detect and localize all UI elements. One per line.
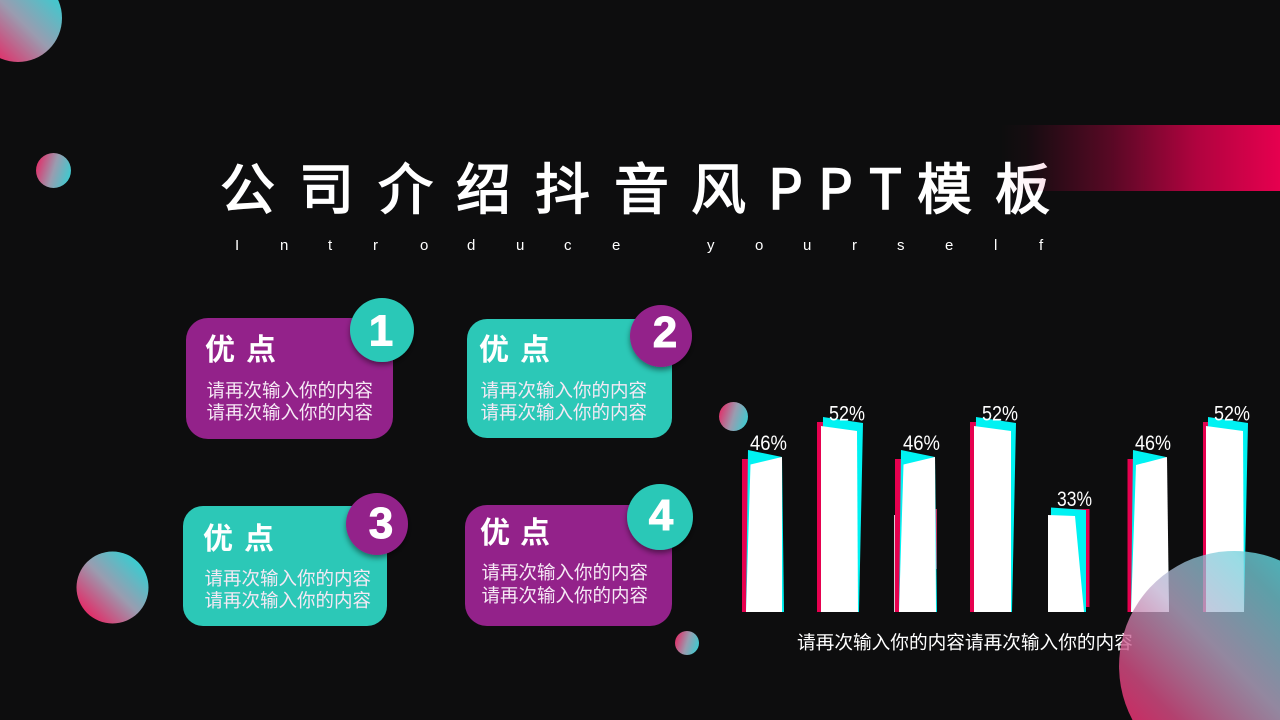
chart caption: 请再次输入你的内容请再次输入你的内容 — [797, 628, 1133, 655]
decorative gradient band — [1000, 125, 1280, 191]
bar 5: 33%: 33% — [1057, 488, 1092, 511]
icon: medium gradient circle left — [76, 552, 148, 624]
bar 4: 52%: 52% — [982, 402, 1018, 426]
icon: small gradient circle left — [36, 153, 71, 188]
bar 3: 46%: 46% — [903, 432, 940, 455]
bar 3: 46% — [894, 432, 940, 612]
bar 1: 46% — [742, 432, 787, 612]
text block: card 4: 请再次输入你的内容 — [482, 582, 648, 608]
badge: number 2: 2 — [653, 308, 677, 357]
bar 7: 52% — [1203, 402, 1250, 612]
icon: small gradient circle above chart — [719, 402, 748, 431]
panel: advantage 4 — [465, 484, 693, 626]
bar 2: 52%: 52% — [829, 402, 865, 426]
icon: large translucent gradient circle — [1119, 551, 1280, 720]
title: 公司介绍抖音风PPT模板 — [220, 145, 1050, 225]
bar 6: 46% — [1128, 432, 1171, 612]
text block: card 4: 请再次输入你的内容 — [482, 559, 648, 585]
text block: card 2 — [480, 377, 647, 425]
text block: card 2: 请再次输入你的内容 — [480, 399, 647, 425]
badge: number 4 — [627, 484, 693, 550]
badge: number 4: 4 — [649, 491, 674, 540]
text block: card 1: 请再次输入你的内容 — [206, 377, 373, 403]
bar 6: 46%: 46% — [1135, 432, 1171, 455]
text block: card 1 — [206, 377, 373, 425]
bar 7: 52%: 52% — [1214, 402, 1250, 426]
text block: card 3 — [204, 565, 371, 613]
bar 1: 46%: 46% — [750, 432, 787, 455]
heading: card 3: 优点 — [203, 514, 285, 558]
badge: number 3 — [346, 493, 408, 555]
heading: card 2: 优点 — [479, 325, 561, 369]
icon: top-left gradient circle — [0, 0, 62, 62]
text block: card 3: 请再次输入你的内容 — [204, 565, 371, 591]
subtitle: Introduceyourself — [235, 237, 1044, 254]
badge: number 1: 1 — [369, 306, 393, 356]
panel: advantage 2 — [467, 305, 692, 438]
panel: advantage 1 — [186, 298, 414, 439]
text block: card 3: 请再次输入你的内容 — [204, 587, 371, 613]
bar 4: 52% — [970, 402, 1018, 612]
icon: small gradient circle bottom center — [675, 631, 699, 655]
heading: card 4: 优点 — [480, 508, 560, 552]
text block: card 4 — [482, 559, 648, 608]
badge: number 3: 3 — [369, 499, 393, 548]
panel: advantage 3 — [183, 493, 408, 626]
bar 2: 52% — [817, 402, 865, 612]
text block: card 2: 请再次输入你的内容 — [480, 377, 647, 403]
text block: card 1: 请再次输入你的内容 — [206, 399, 373, 425]
badge: number 2 — [630, 305, 692, 367]
badge: number 1 — [350, 298, 414, 362]
bar chart — [742, 402, 1250, 612]
heading: card 1: 优点 — [205, 325, 287, 369]
bar 5: 33% — [1048, 488, 1092, 612]
